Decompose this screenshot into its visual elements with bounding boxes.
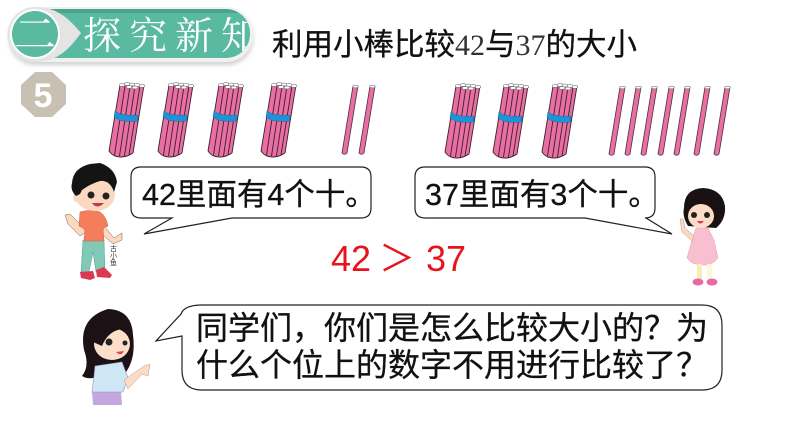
speech bubble: 42: 42里面有4个十。 bbox=[142, 178, 376, 212]
example number badge 5 bbox=[21, 72, 66, 117]
teacher speech bubble: 同学们，你们是怎么比较大小的？为 bbox=[196, 310, 708, 346]
boy character bbox=[65, 163, 122, 280]
teacher speech bubble bbox=[156, 305, 722, 390]
comparison 42 > 37: ＞ bbox=[379, 238, 415, 279]
section header badge: 二 bbox=[14, 13, 56, 59]
speech bubble: 37: 37里面有3个十。 bbox=[425, 178, 659, 212]
section header badge: 探究新知 bbox=[83, 16, 267, 58]
speech bubble: 42 bbox=[131, 167, 376, 234]
boy character: 古小鱼 bbox=[110, 244, 117, 266]
section header badge bbox=[7, 7, 267, 65]
sticks: 37 bbox=[445, 84, 730, 158]
title: 利用小棒比较42与37的大小 bbox=[272, 28, 637, 62]
comparison 42 > 37: 42 bbox=[331, 238, 371, 279]
comparison 42 > 37 bbox=[331, 238, 466, 279]
teacher speech bubble: 什么个位上的数字不用进行比较了？ bbox=[196, 347, 708, 383]
comparison 42 > 37: 37 bbox=[426, 238, 466, 279]
teacher character bbox=[82, 309, 150, 405]
sticks: 42 bbox=[109, 83, 375, 157]
girl character bbox=[680, 188, 725, 286]
example number badge 5: 5 bbox=[34, 77, 52, 115]
speech bubble: 37 bbox=[415, 167, 672, 234]
